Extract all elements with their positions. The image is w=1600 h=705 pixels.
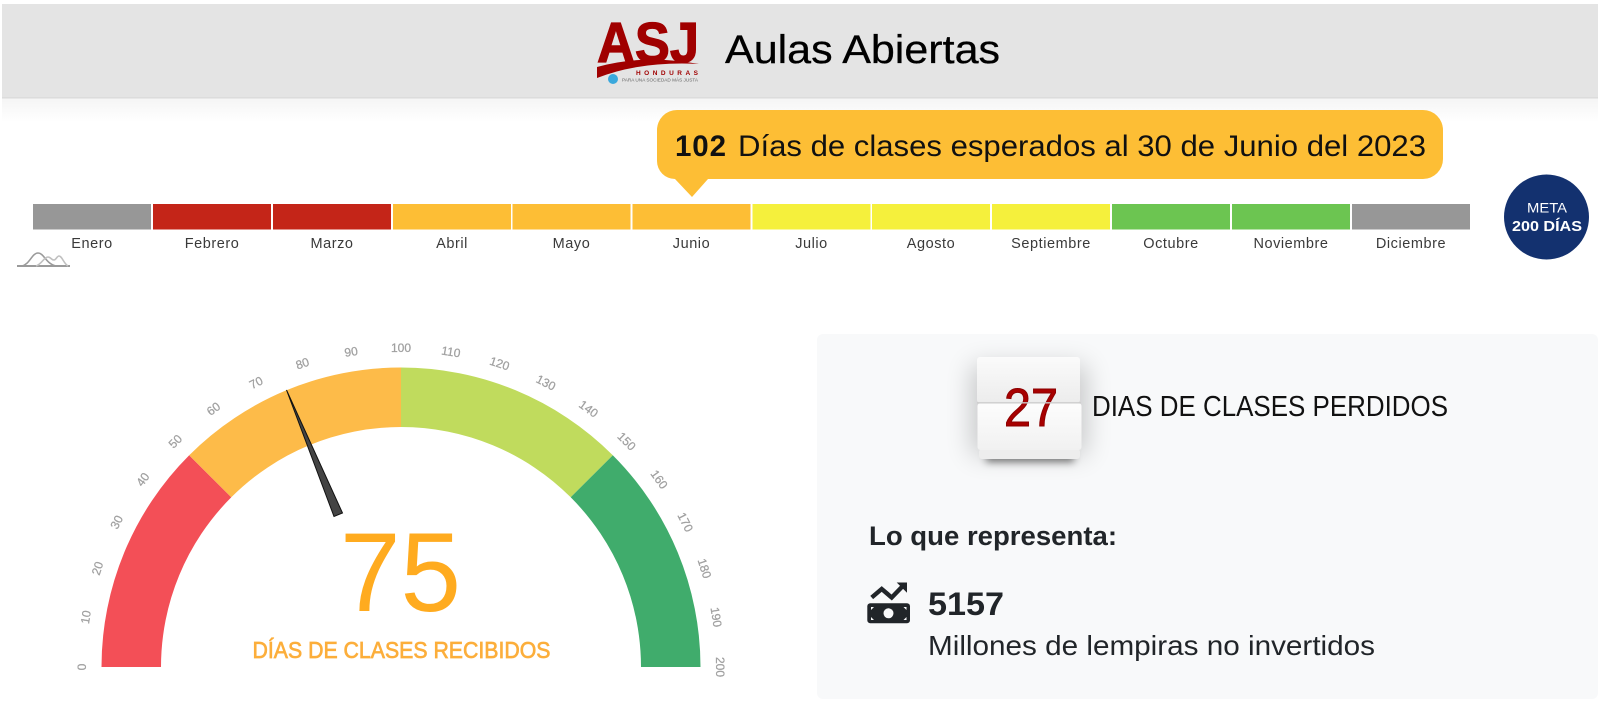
header band <box>2 4 1598 122</box>
heading: dias de clases perdidos: DIAS DE CLASES PERDIDOS <box>1092 391 1448 423</box>
gauge scale labels: 180 <box>695 557 714 580</box>
gauge zone: orange 50-100 <box>189 368 401 497</box>
segment: Julio <box>752 204 870 230</box>
badge: meta 200 dias <box>1504 174 1589 260</box>
gauge caption: DÍAS DE CLASES RECIBIDOS <box>252 637 550 663</box>
gauge chart <box>75 341 727 677</box>
gauge scale labels: 130 <box>534 372 558 394</box>
gauge scale labels: 90 <box>343 344 359 360</box>
gauge zone: red 0-50 <box>101 455 231 667</box>
logo: ASJ Honduras: ASJ <box>597 11 699 75</box>
segment: Marzo <box>273 204 391 230</box>
gauge scale labels: 110 <box>440 344 462 360</box>
month labels: Mayo <box>553 236 590 252</box>
gauge scale labels: 60 <box>204 399 223 419</box>
month timeline <box>33 204 1470 252</box>
gauge scale labels: 170 <box>674 510 696 535</box>
gauge zone: light green 100-150 <box>401 368 613 497</box>
icon: money trend up <box>867 582 910 623</box>
icon: small curves <box>17 253 70 266</box>
segment: Agosto <box>872 204 990 230</box>
month labels: Noviembre <box>1253 236 1329 252</box>
gauge scale labels: 70 <box>247 373 266 392</box>
month labels: Octubre <box>1143 236 1199 252</box>
flip card: 27: 27 <box>1004 378 1058 438</box>
gauge scale labels: 120 <box>488 354 512 373</box>
gauge scale labels: 140 <box>576 397 601 421</box>
gauge value: 75 <box>340 510 461 635</box>
gauge scale labels: 190 <box>708 606 725 628</box>
panel: lost days <box>817 334 1598 699</box>
stat label: Millones de lempiras no invertidos <box>928 630 1375 661</box>
badge: meta 200 dias: META <box>1527 200 1567 216</box>
logo: ASJ Honduras: PARA UNA SOCIEDAD MÁS JUSTA <box>622 76 699 82</box>
segment: Mayo <box>512 204 630 230</box>
segment: Noviembre <box>1232 204 1350 230</box>
segment: Enero <box>33 204 151 230</box>
segment: Septiembre <box>992 204 1110 230</box>
month labels: Agosto <box>907 236 955 252</box>
stat value: 5157 <box>928 586 1004 622</box>
segment: Abril <box>393 204 511 230</box>
month labels: Febrero <box>185 236 239 252</box>
gauge scale labels: 30 <box>107 513 126 531</box>
flip card: 27 <box>972 357 1086 462</box>
gauge scale labels: 20 <box>89 560 106 577</box>
badge: meta 200 dias: 200 DÍAS <box>1512 218 1582 235</box>
gauge scale labels: 150 <box>615 429 639 454</box>
callout text: 102 <box>675 130 726 163</box>
month labels <box>71 236 1446 252</box>
month labels: Septiembre <box>1011 236 1091 252</box>
gauge scale labels: 10 <box>78 609 94 625</box>
gauge scale labels: 80 <box>294 355 311 372</box>
segment: Febrero <box>153 204 271 230</box>
month labels: Abril <box>436 236 468 252</box>
callout: expected days <box>657 110 1443 197</box>
gauge needle <box>286 390 342 516</box>
month labels: Marzo <box>310 236 354 252</box>
segment: Diciembre <box>1352 204 1470 230</box>
callout text: Días de clases esperados al 30 de Junio del 2023 <box>738 130 1426 163</box>
month labels: Julio <box>795 236 828 252</box>
gauge scale labels: 200 <box>713 657 727 677</box>
gauge zone: green 150-200 <box>571 455 700 667</box>
gauge scale labels: 50 <box>166 432 185 451</box>
gauge scale labels <box>75 341 727 677</box>
month labels: Enero <box>71 236 113 252</box>
logo: ASJ Honduras: HONDURAS <box>636 70 699 77</box>
gauge scale labels: 0 <box>75 663 89 670</box>
month labels: Diciembre <box>1376 236 1446 252</box>
segment: Octubre <box>1112 204 1230 230</box>
gauge scale labels: 100 <box>391 341 411 355</box>
segment: Junio <box>632 204 750 230</box>
title: Aulas Abiertas <box>725 28 1000 72</box>
subheading: Lo que representa: <box>869 521 1117 551</box>
month labels: Junio <box>673 236 710 252</box>
gauge scale labels: 40 <box>133 470 153 489</box>
gauge scale labels: 160 <box>648 467 671 492</box>
